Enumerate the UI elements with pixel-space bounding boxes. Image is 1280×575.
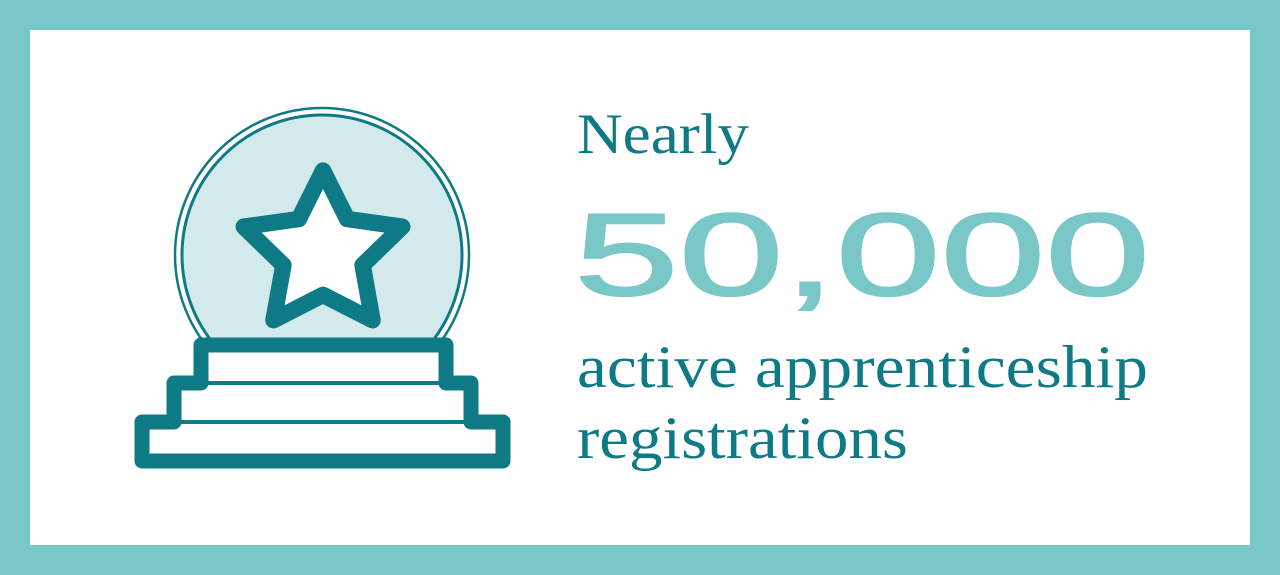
text: active apprenticeship: active apprenticeship (577, 334, 1148, 400)
text: Nearly: Nearly (577, 103, 750, 166)
text: 50,000: 50,000 (574, 189, 1150, 320)
icon: star trophy on podium (135, 108, 510, 468)
text: registrations: registrations (577, 405, 908, 471)
